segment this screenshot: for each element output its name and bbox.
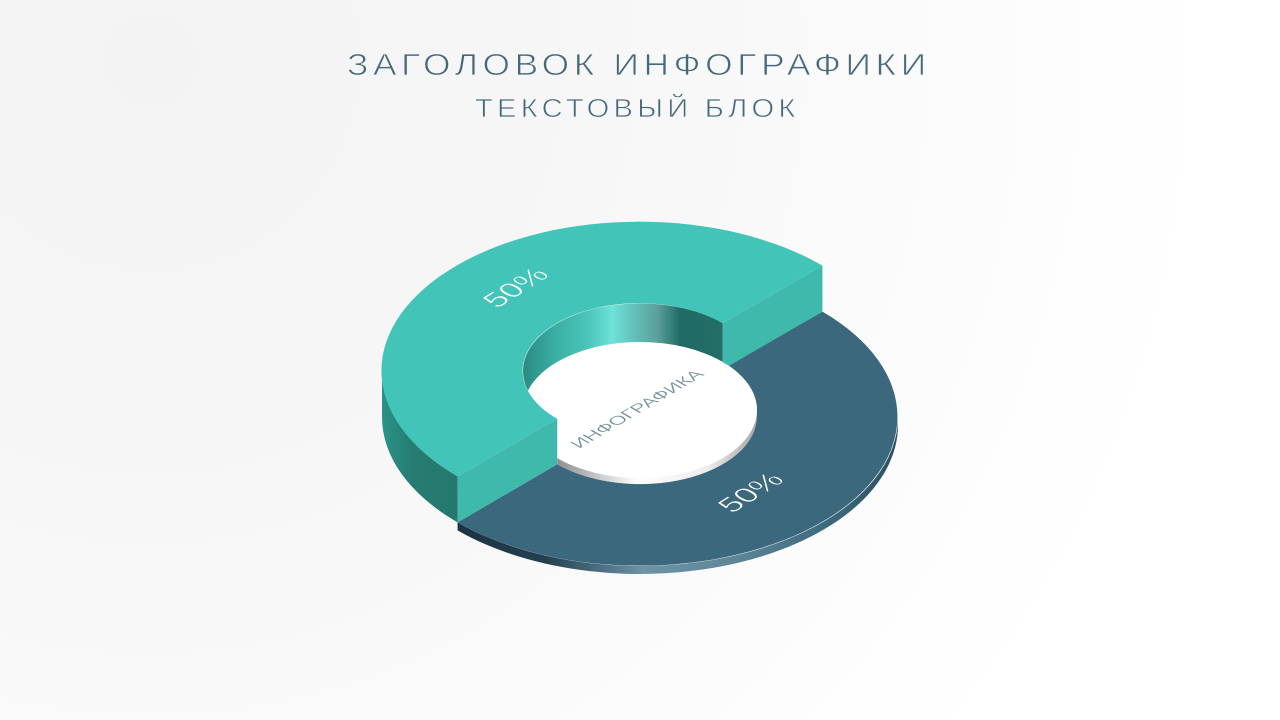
inner wall of teal segment <box>523 303 723 390</box>
label: center text: ИНФОГРАФИКА <box>565 366 709 451</box>
3D donut chart <box>381 222 898 574</box>
segment: teal 50% block <box>381 222 822 522</box>
infographic canvas <box>348 54 923 574</box>
back cut face <box>723 266 822 366</box>
outer side <box>382 371 458 522</box>
front cut face <box>458 419 557 522</box>
top face <box>381 222 822 476</box>
segment: dark blue 50% slab <box>458 312 898 574</box>
title: ЗАГОЛОВОК ИНФОГРАФИКИ <box>347 48 926 82</box>
center disc <box>523 303 757 484</box>
label: teal 50%: 50% <box>476 263 556 312</box>
subtitle: ТЕКСТОВЫЙ БЛОК <box>475 93 795 123</box>
label: blue 50%: 50% <box>711 468 791 517</box>
